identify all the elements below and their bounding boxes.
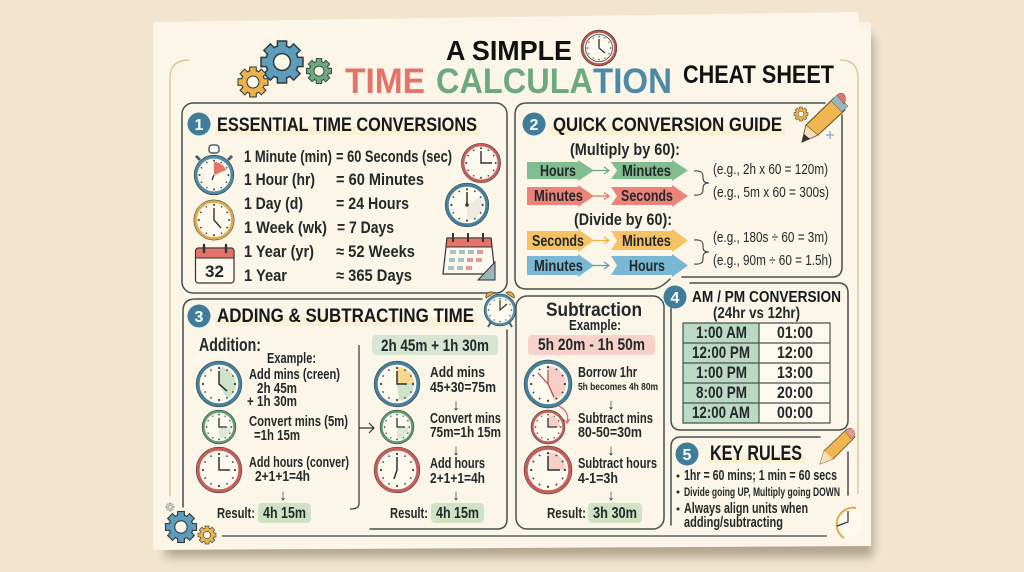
title: A SIMPLE [446,35,572,66]
icon: plus [826,131,834,139]
badge 2: 2 [530,117,539,134]
heading 1: ESSENTIAL TIME CONVERSIONS [217,115,477,136]
brace multiply [694,171,709,195]
badge 4: 4 [671,290,680,307]
worked steps text: ↓ [452,487,460,504]
addition steps text: Add hours (conver) [249,455,349,471]
arrows hours to minutes [527,160,688,181]
worked clock green [382,412,412,442]
icon: gears top [238,41,332,97]
arrows minutes to seconds [527,185,688,207]
conversion table: 12:00 PM [692,344,750,362]
arrows minutes to hours: Hours [629,258,665,275]
outer frame lines [170,60,858,536]
title: CHEAT SHEET [683,61,834,89]
icon: corner clock [831,506,863,538]
conversion rows: 1 Minute (min) [244,148,332,166]
conversion table: 01:00 [777,324,813,342]
arrows seconds to minutes [527,229,688,252]
addition clock green [204,412,234,442]
icon: title clock [582,32,616,64]
icon: calendar 32 [196,245,234,283]
divide examples: (e.g., 90m ÷ 60 = 1.5h) [713,253,832,269]
result addition left: Result: [217,506,255,522]
icon: pencil small [820,428,855,464]
multiply examples: (e.g., 5m x 60 = 300s) [713,185,829,201]
worked clock blue [376,363,418,405]
conversion table: 1:00 PM [696,364,747,382]
panel 1: essential time conversions [182,103,507,293]
result addition left [217,503,311,523]
badge 1: 1 [195,117,204,134]
conversion rows: 1 Hour (hr) [244,171,315,189]
conversion rows [244,148,452,285]
subheading 4: (24hr vs 12hr) [713,305,800,322]
panel 3: adding and subtracting time [183,292,514,529]
worked clock red [376,449,418,491]
result subtraction: 3h 30m [593,505,637,522]
subtraction steps text: Subtract mins [578,411,653,427]
example pill: 2h 45m + 1h 30m [381,337,489,355]
multiply examples [713,162,829,201]
arrows minutes to seconds: Seconds [621,188,673,205]
badge 2 [522,112,546,136]
brace divide [694,240,709,264]
icon: blue clock [447,185,487,225]
arrows minutes to hours [527,254,688,277]
arrows seconds to minutes: Seconds [532,233,584,250]
subtraction steps text: 4-1=3h [578,471,618,487]
arrows hours to minutes: Hours [540,163,576,180]
rules list: Divide going UP, Multiply going DOWN [684,487,840,499]
subtraction steps text: ↓ [607,396,615,413]
conversion table: 13:00 [777,364,813,382]
icon: red clock [463,145,499,181]
badge 4 [664,286,686,308]
addition steps text: =1h 15m [254,428,300,444]
badge 5: 5 [683,447,692,464]
worked steps text: Convert mins [430,411,501,427]
subtraction steps text: ↓ [607,487,615,504]
addition steps text [247,351,349,504]
title: TION [593,62,672,101]
conversion table: 1:00 AM [696,324,747,342]
paper sheet [153,12,871,550]
conversion table: 12:00 [777,344,813,362]
addition clock blue [198,363,240,405]
addition steps text: Add mins (creen) [249,367,340,383]
subtraction steps text: Subtract hours [578,456,657,472]
conversion rows: ≈ 365 Days [336,267,412,285]
title: CALCULA [436,62,593,101]
divider arrow [350,345,374,509]
panel 4: am pm conversion [664,283,848,430]
icon: gears bottom [166,503,216,544]
subtraction steps text: 80-50=30m [578,425,642,441]
subtraction clock red [526,448,570,492]
rules list: 1hr = 60 mins; 1 min = 60 secs [684,468,837,484]
subtraction steps text [578,365,658,504]
badge 3: 3 [195,309,204,326]
result addition right [390,503,484,523]
arrows seconds to minutes: Minutes [622,233,671,250]
subtraction steps text: Borrow 1hr [578,365,637,381]
result subtraction [547,503,642,523]
subheading divide: (Divide by 60): [574,210,672,229]
worked steps text: 75m=1h 15m [430,425,501,441]
addition steps text: Example: [267,351,316,367]
worked steps text [430,365,501,504]
addition steps text: + 1h 30m [247,394,297,410]
conversion rows: 1 Year [244,267,288,285]
addition steps text: 2h 45m [257,381,297,397]
subtraction clock blue [526,362,570,406]
conversion rows: = 60 Seconds (sec) [336,148,452,166]
heading 5: KEY RULES [710,442,802,465]
example label: Example: [569,318,621,334]
arrows minutes to seconds: Minutes [534,188,583,205]
addition steps text: ↓ [279,487,287,504]
icon: stopwatch [196,145,232,193]
borrow arrow [559,406,570,423]
badge 1 [188,112,210,136]
arrows minutes to hours: Minutes [534,258,583,275]
conversion table [683,323,830,423]
title: TIME [345,62,425,101]
conversion rows: = 7 Days [337,219,394,237]
subtraction steps text: 5h becomes 4h 80m [578,381,658,393]
panel 5: key rules [671,428,863,538]
arrows hours to minutes: Minutes [622,163,671,180]
icon: wall calendar [443,233,495,280]
icon: calendar 32: 32 [205,262,224,281]
paper shadow [165,35,873,557]
badge 5 [676,442,698,466]
icon: pencil [802,93,848,142]
heading 3: ADDING & SUBTRACTING TIME [217,306,474,327]
subtraction steps text: ↓ [607,442,615,459]
subheading multiply: (Multiply by 60): [570,140,680,159]
result addition right: Result: [390,506,428,522]
conversion rows: = 60 Minutes [336,171,424,189]
divide examples [713,230,832,269]
subtraction pill: 5h 20m - 1h 50m [538,336,645,354]
conversion table: 20:00 [777,384,813,402]
worked steps text: ↓ [452,442,460,459]
rules list: adding/subtracting [684,515,783,531]
subtraction clock small red [532,412,564,442]
result subtraction: Result: [547,506,586,522]
conversion table: 12:00 AM [692,404,750,422]
worked steps text: Add mins [430,365,485,381]
conversion rows: ≈ 52 Weeks [336,243,415,261]
heading 2: QUICK CONVERSION GUIDE [553,115,782,136]
rules list: Always align units when [684,501,808,517]
worked steps text: ↓ [452,397,460,414]
divide examples: (e.g., 180s ÷ 60 = 3m) [713,230,828,246]
badge 3 [188,304,210,328]
multiply examples: (e.g., 2h x 60 = 120m) [713,162,828,178]
result addition left: 4h 15m [263,505,306,522]
worked steps text: 2+1+1=4h [430,471,485,487]
conversion table: 00:00 [777,404,813,422]
worked steps text: Add hours [430,456,485,472]
icon: small gold gear [794,107,808,121]
addition clock red [198,449,240,491]
conversion rows: 1 Year (yr) [244,243,314,261]
addition heading: Addition: [199,335,261,355]
panel: subtraction [516,296,664,529]
worked steps text: 45+30=75m [430,380,496,396]
icon: alarm clock [486,292,514,327]
addition steps text: 2+1+1=4h [255,469,310,485]
conversion rows: = 24 Hours [336,195,409,213]
icon: gold clock [196,202,232,238]
result addition right: 4h 15m [436,505,479,522]
rules list [676,468,840,531]
conversion table: 8:00 PM [696,384,747,402]
heading 4: AM / PM CONVERSION [692,289,841,306]
addition steps text: Convert mins (5m) [249,414,348,430]
title [345,35,834,101]
subtraction heading: Subtraction [546,300,642,321]
panel 2: quick conversion guide [515,93,848,289]
conversion rows: 1 Day (d) [244,195,303,213]
conversion rows: 1 Week (wk) [244,219,327,237]
